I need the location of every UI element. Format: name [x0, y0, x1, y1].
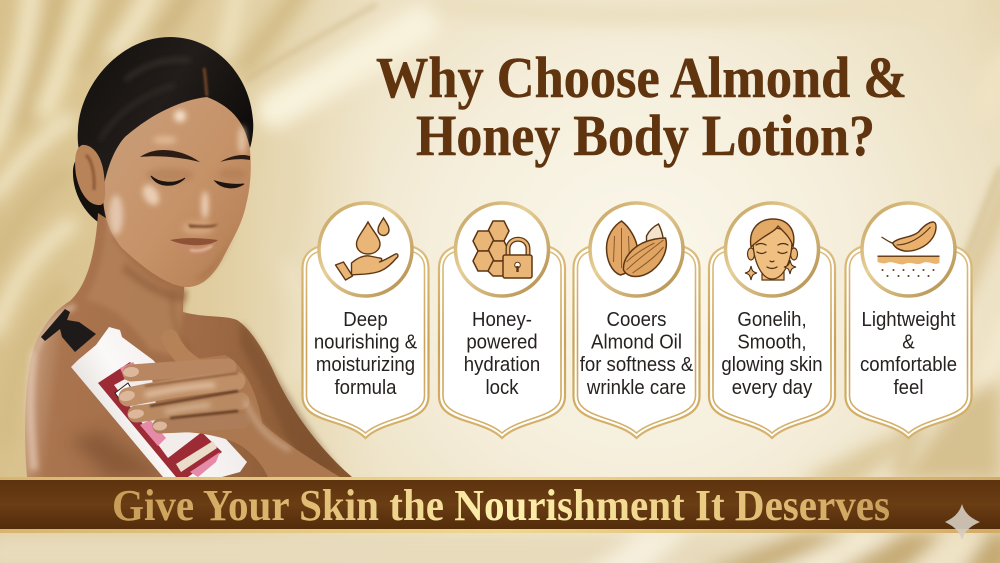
banner: [0, 477, 1000, 533]
text: wrinkle care: [586, 377, 686, 399]
text: [860, 309, 957, 399]
text: comfortable: [860, 355, 957, 376]
text: Cooers: [607, 309, 666, 331]
text: for softness &: [580, 355, 693, 376]
shoulder highlight: [36, 306, 75, 350]
text: Lightweight: [861, 309, 956, 331]
neck and torso: [25, 213, 352, 477]
bottle: [41, 309, 247, 477]
text: Gonelih,: [737, 309, 807, 331]
bottle label: [98, 362, 222, 477]
hair: [78, 37, 253, 195]
panel: glowing skin: [709, 203, 835, 438]
banner slogan: Give Your Skin the Nourishment It Deserves: [112, 481, 890, 530]
icon: sparkle: [945, 504, 980, 540]
woman with lotion bottle: [25, 37, 352, 477]
text: Smooth,: [737, 332, 807, 354]
text: nourishing &: [314, 332, 417, 354]
icon: honeycomb and padlock: [456, 203, 548, 296]
nose: [188, 224, 218, 228]
text: [721, 309, 823, 399]
title: Honey Body Lotion?: [416, 103, 875, 168]
panel: honey hydration lock: [439, 203, 565, 438]
text: powered: [466, 332, 538, 354]
fingernails: [123, 366, 139, 378]
hair bun behind head: [73, 155, 112, 222]
text: feel: [894, 377, 923, 399]
face: [103, 95, 251, 287]
text: moisturizing: [316, 355, 415, 376]
text: every day: [732, 377, 813, 399]
text: [314, 309, 417, 399]
text: Honey-: [472, 309, 532, 331]
icon: feather on skin: [862, 203, 955, 296]
bottle pump: [41, 309, 96, 352]
lips: [170, 238, 218, 245]
text: &: [902, 332, 915, 354]
icon: glowing face: [726, 203, 818, 296]
text: formula: [335, 377, 397, 399]
icon: almonds: [590, 203, 683, 296]
neck shading: [85, 225, 190, 360]
panel: lightweight feel: [846, 203, 972, 438]
bottle body: [71, 327, 247, 477]
icon: drops over hand: [319, 203, 412, 296]
panel: deep nourishing: [302, 203, 428, 438]
text: lock: [485, 377, 519, 399]
skin highlights on face: [109, 110, 246, 235]
text: glowing skin: [721, 355, 823, 376]
eyebrows: [140, 150, 200, 162]
ear: [75, 145, 105, 205]
text: [464, 309, 540, 399]
title: [376, 45, 907, 168]
text: hydration: [464, 355, 540, 376]
eyes: [151, 176, 185, 185]
panel: almond oil: [574, 203, 700, 438]
text: [580, 309, 693, 399]
bottom silk: [0, 380, 1000, 563]
text: Almond Oil: [591, 332, 682, 354]
hand: [118, 338, 340, 477]
text: Deep: [343, 309, 388, 331]
title: Why Choose Almond &: [376, 45, 907, 110]
